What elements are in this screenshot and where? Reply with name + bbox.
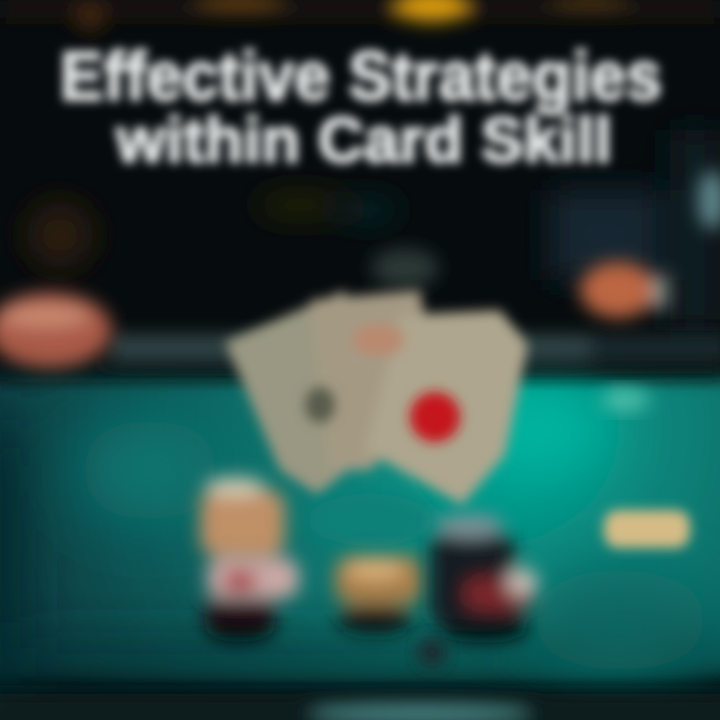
playing cards	[225, 290, 528, 505]
card: middle	[310, 290, 440, 470]
table felt	[0, 378, 720, 681]
center shadow shape behind cards	[371, 248, 439, 288]
chip stack: center	[335, 555, 423, 634]
chip: small dark front	[417, 636, 447, 668]
card: right	[365, 310, 528, 505]
table bottom rim	[0, 694, 720, 720]
right hand and sleeve	[580, 170, 720, 318]
card marks	[305, 324, 460, 442]
chip: single right	[604, 510, 690, 548]
left hand	[0, 292, 112, 368]
card: left	[225, 290, 372, 495]
table rail	[0, 335, 720, 374]
chips: teal mound	[308, 494, 432, 546]
background: top lights	[0, 0, 720, 33]
background: dim room shapes	[26, 130, 720, 330]
chip: distant pale marker	[601, 389, 649, 411]
card mark: red circle	[410, 392, 460, 442]
chip stack: right	[430, 514, 538, 642]
table edge vignette	[0, 394, 720, 710]
chip stack: left	[200, 477, 299, 642]
title line 2: within Card Skill	[115, 104, 612, 176]
title	[60, 37, 662, 176]
title line 1: Effective Strategies	[60, 37, 662, 115]
